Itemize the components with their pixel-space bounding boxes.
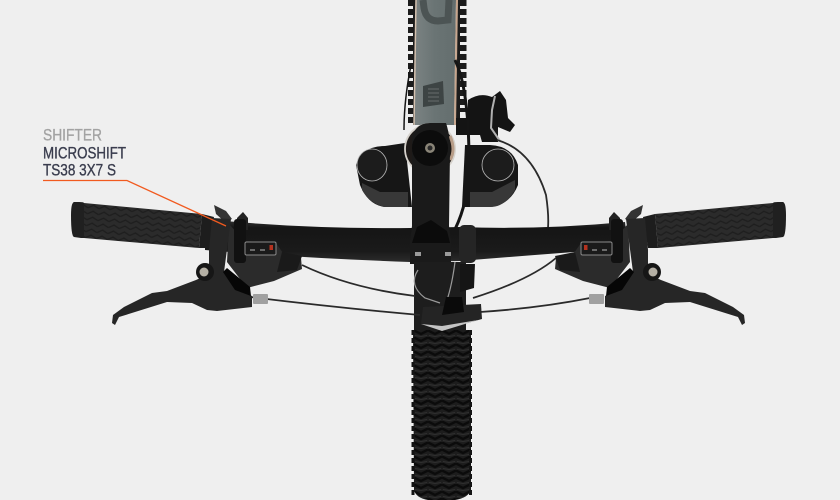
callout leader line: [43, 180, 226, 226]
brake and shift cables: [250, 258, 590, 315]
callout label: MICROSHIFT: [43, 144, 126, 162]
front wheel top: [412, 0, 463, 125]
head tube bearing ring: [405, 124, 455, 174]
left grip, shifter and brake lever: [71, 202, 302, 325]
fork crown and reflector bracket: [421, 264, 482, 331]
callout label: SHIFTER: [43, 126, 102, 144]
callout label: TS38 3X7 S: [43, 160, 116, 180]
frame: head tube: [414, 0, 457, 125]
callout label: [43, 126, 126, 180]
rear brake lobes: [356, 143, 518, 207]
front wheel bottom: [413, 262, 471, 500]
handlebar: [205, 219, 628, 263]
disc brake caliper and cable: [404, 60, 548, 235]
stem: [410, 123, 451, 264]
right grip, shifter and brake lever: [555, 202, 786, 325]
